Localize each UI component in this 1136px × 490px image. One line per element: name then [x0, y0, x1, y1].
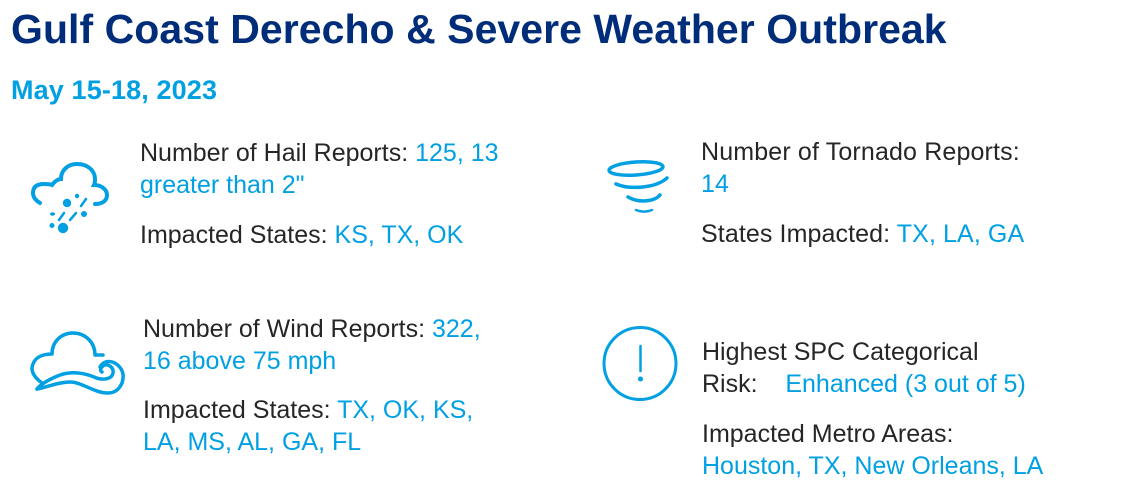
- text: wind states: [143, 396, 473, 456]
- text: SPC risk: [702, 338, 1026, 398]
- text: metro areas: [702, 420, 1044, 480]
- text: tornado states: States Impacted: TX, LA, GA: [701, 220, 1024, 248]
- text: hail impacted states: Impacted States: KS, TX, OK: [140, 221, 463, 249]
- text: SPC risk: Highest SPC Categorical: [702, 338, 979, 366]
- text: metro areas: Impacted Metro Areas:: [702, 420, 954, 448]
- text: tornado reports: Number of Tornado Reports:: [701, 138, 1020, 166]
- text: wind states: LA, MS, AL, GA, FL: [143, 428, 361, 456]
- text: hail reports: Number of Hail Reports: 125, 13: [140, 139, 499, 167]
- title: Gulf Coast Derecho & Severe Weather Outbreak: [11, 6, 947, 52]
- text: SPC risk: Risk: Enhanced (3 out of 5): [702, 370, 1026, 398]
- text: metro areas: Houston, TX, New Orleans, LA: [702, 452, 1043, 480]
- text: wind states: Impacted States: TX, OK, KS,: [143, 396, 473, 424]
- text: hail reports: greater than 2": [140, 171, 305, 199]
- text: wind reports: 16 above 75 mph: [143, 347, 336, 375]
- text: tornado reports: 14: [701, 170, 729, 198]
- text: hail reports: [140, 139, 499, 199]
- subtitle: dates: May 15-18, 2023: [11, 75, 217, 105]
- text: tornado reports: [701, 138, 1020, 198]
- text: wind reports: [143, 315, 481, 375]
- text: wind reports: Number of Wind Reports: 322,: [143, 315, 481, 343]
